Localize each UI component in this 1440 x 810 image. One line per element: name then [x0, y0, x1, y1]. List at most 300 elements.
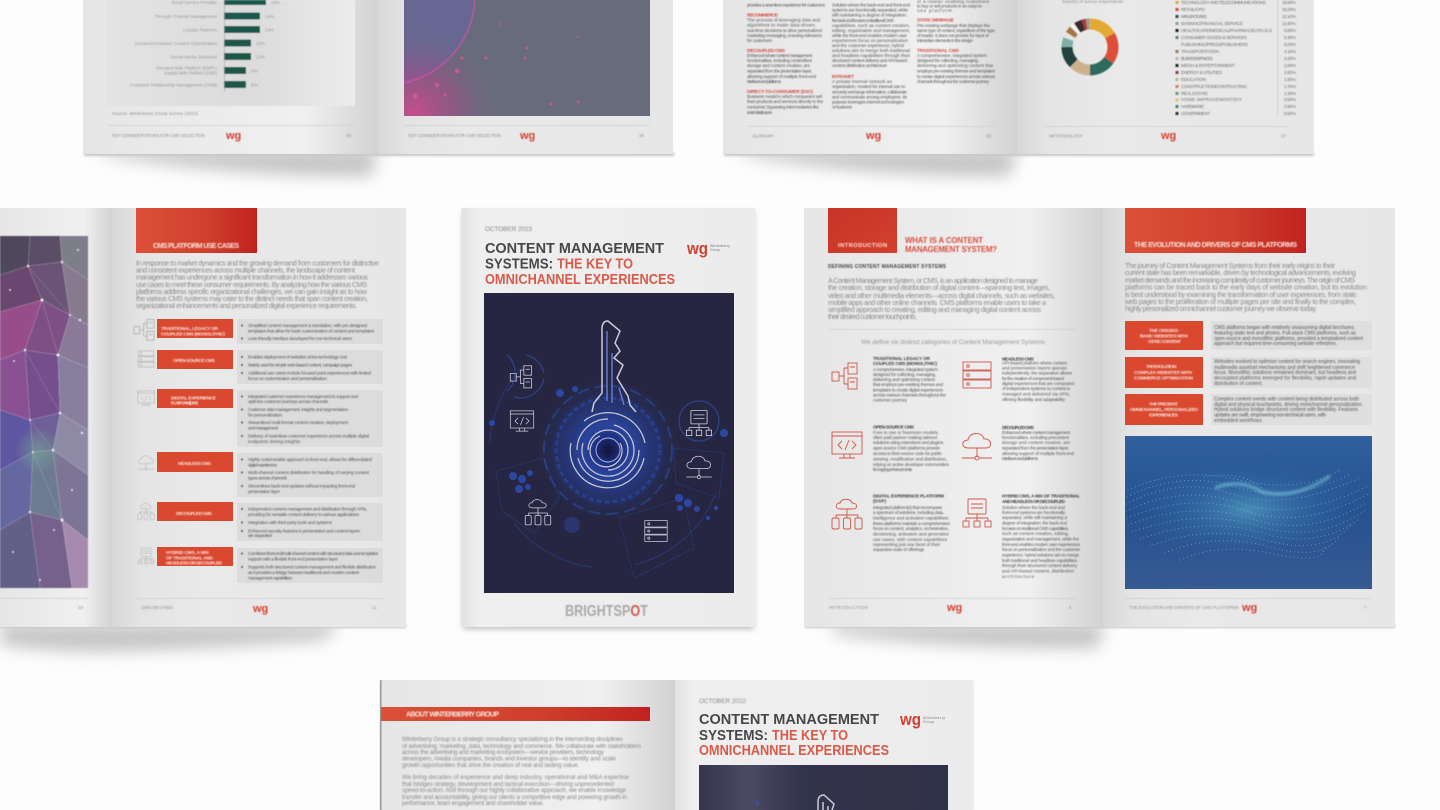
- category: digital experience platform: these platforms maintain a comprehensive: [873, 521, 950, 526]
- use case grey panels: [237, 319, 383, 583]
- category: hybrid: focuses on traditional CMS capabilities,: [1002, 526, 1069, 531]
- industry legend table: EDUCATION: [1181, 77, 1206, 82]
- glossary columns: capabilities, such as content creation,: [832, 23, 910, 28]
- section header: introduction tab: [828, 208, 897, 253]
- glossary columns: experiences focus on personalization: [832, 38, 908, 43]
- industry legend table: [1176, 0, 1296, 116]
- glossary columns: [747, 0, 996, 115]
- category: open-source: OPEN-SOURCE CMS: [873, 424, 914, 430]
- use case red labels: DECOUPLED CMS: [176, 511, 213, 517]
- bar chart panel: technology adoption: Supply-Side Platform (SSP): [164, 70, 217, 76]
- glossary columns: delivering and optimizing content that: [917, 63, 994, 68]
- about paragraphs: transfer and accountability, giving our clients a competitive edge and powering growth in: [402, 794, 628, 801]
- evolution stage: origins: featuring static text and photos. Full-stack CMS platforms, such as: [1214, 330, 1356, 336]
- evolution stage: present: [1125, 394, 1372, 425]
- use case red labels: [157, 319, 233, 566]
- bottom brochure spread: about Winterberry and cover: [380, 680, 973, 810]
- use case bullet text: templates that allow for basic customization of content and templates: [248, 328, 375, 334]
- glossary columns: RECOMMERCE: [747, 12, 779, 18]
- bar chart panel: technology adoption: 14%: [265, 28, 274, 32]
- intro paragraph: organizational enhancements and personalized digital experience requirements.: [136, 301, 357, 310]
- category: headless: [1002, 356, 1074, 402]
- footer: methodology page: wg: [1160, 130, 1176, 142]
- industry legend table: 12.10%: [1282, 14, 1296, 19]
- footer: evolution page: [1125, 598, 1372, 614]
- use case bullet text: as it provides a bridge between traditional and modern content: [248, 570, 360, 575]
- industry legend table: TECHNOLOGY AND TELECOMMUNICATIONS: [1181, 0, 1266, 5]
- glossary columns: The process of leveraging data and: [747, 18, 820, 22]
- glossary columns: consumer, bypassing intermediaries like: [747, 104, 819, 110]
- category: hybrid: front-end enables modern user experiences: [1002, 542, 1081, 547]
- category: open-source: solutions using extensions and plugins;: [873, 440, 944, 445]
- about paragraphs: speed-to-action. And through our highly collaborative approach, we enable knowledge: [402, 787, 627, 794]
- definition paragraph: mobile apps and other online channels. CMS platforms enable users to take a: [828, 298, 1046, 307]
- cover title: CONTENT MANAGEMENT: [485, 240, 665, 257]
- category: hybrid: through their structured content delivery: [1002, 563, 1078, 568]
- category: open-source: [873, 424, 950, 472]
- evolution stage: present: Complex content needs with content being distributed across both: [1214, 396, 1359, 402]
- bar chart panel: technology adoption: 12%: [256, 41, 265, 46]
- category: digital experience platform: use cases, with content capabilities: [873, 537, 948, 542]
- about paragraphs: growth opportunities that drive the creation of real and lasting value.: [402, 762, 579, 769]
- industry legend table: 2.60%: [1284, 63, 1296, 68]
- about paragraphs: of advertising, marketing, data, technology and commerce. We collaborate with stakeholders: [402, 743, 641, 750]
- footer: use cases page: wg: [252, 603, 268, 615]
- use case bullet text: and management: [248, 426, 279, 430]
- use case bullet text: Additional use cases include focused point experiences with limited: [248, 370, 371, 376]
- bottom cover title: [699, 711, 889, 759]
- use case bullet text: [241, 323, 379, 580]
- use case bullet text: Customer data management, insights and segmentation: [248, 407, 348, 412]
- category: digital experience platform: [873, 494, 950, 552]
- category: hybrid: HYBRID CMS, A MIX OF TRADITIONAL: [1002, 494, 1080, 498]
- category: traditional legacy: customer journey: [873, 398, 908, 402]
- category: traditional legacy: [873, 356, 946, 402]
- use case bullet text: types across channels: [248, 476, 288, 480]
- about paragraphs: [402, 736, 641, 807]
- category: hybrid: organization and management, while the: [1002, 536, 1079, 542]
- footer: glossary page: wg: [865, 130, 881, 142]
- evolution paragraph: web pages to the proliferation of multiple pages per site and finally to the complex,: [1124, 297, 1356, 306]
- evolution stage: evolution: THE EVOLUTION:: [1146, 364, 1177, 370]
- use case bullet text: digital experiences: [248, 462, 278, 468]
- cover logo: [686, 239, 730, 258]
- footer: right page: wg: [519, 130, 535, 142]
- cover title: OMNICHANNEL EXPERIENCES: [485, 271, 675, 288]
- glossary columns: still maintaining a degree of integration;: [832, 12, 907, 18]
- glossary columns: and communicate among employees. Its: [832, 94, 908, 100]
- bottom cover title: SYSTEMS:: [699, 727, 768, 744]
- glossary columns: for customers: [747, 38, 773, 43]
- use case red labels: COUPLED CMS (MONOLITHIC): [161, 332, 225, 338]
- category: hybrid: [1002, 494, 1081, 579]
- footer: right page: [404, 125, 650, 142]
- footer: evolution page: wg: [1241, 602, 1257, 614]
- use case bullet text: for personalization: [248, 412, 282, 418]
- evolution stage: origins: approach but required time-consuming website refreshes.: [1214, 341, 1337, 347]
- evolution stage: origins: STATIC CONTENT: [1148, 339, 1181, 345]
- bar chart panel: technology adoption: Social Media Solutions: [170, 54, 218, 60]
- industry legend table: HOME IMPROVEMENT/DIY: [1181, 97, 1243, 102]
- glossary columns: systems are functionally separated, while: [832, 8, 908, 12]
- use case bullet text: Supports both structured content management and flexible distribution: [248, 564, 376, 570]
- use case bullet text: Multi-channel content distribution for handling of varying content: [248, 470, 370, 475]
- industry legend table: RETAIL/CPG: [1181, 7, 1205, 12]
- category: headless: API-based platform where content: [1002, 360, 1068, 366]
- category: traditional legacy: templates to create digital experiences: [873, 388, 944, 392]
- category: digital experience platform: decisioning, activation and generative: [873, 532, 949, 536]
- industry legend table: HARDWARE: [1181, 104, 1204, 109]
- glossary columns: editing, organization and management,: [832, 28, 910, 33]
- bottom cover logo: Group: [923, 720, 934, 724]
- bar chart panel: technology adoption: Source: Winterberry Group Survey (2023): [112, 111, 198, 116]
- glossary columns: to buy or sell products in an easy-to-: [917, 4, 983, 8]
- category: headless: digital experiences that are composed: [1002, 381, 1074, 386]
- glossary columns: algorithms to make data-driven,: [747, 22, 816, 28]
- bar chart panel: technology adoption: Through Channel Management: [154, 14, 218, 19]
- category: digital experience platform: focus on content, analytics, orchestration,: [873, 526, 949, 531]
- industry legend table: HEALTHCARE/MEDICAL/PHARMACEUTICALS: [1181, 28, 1272, 33]
- category: traditional legacy: that employs pre-existing themes and: [873, 382, 943, 387]
- use case red labels: OF TRADITIONAL AND: [166, 556, 214, 562]
- category: decoupled: Enhanced where content management: [1002, 430, 1071, 435]
- footer: methodology page: 37: [1281, 134, 1287, 138]
- industry legend table: 5.40%: [1284, 35, 1296, 40]
- category: headless: independently; the separation allows: [1002, 370, 1073, 376]
- glossary columns: TRADITIONAL CMS: [917, 48, 960, 54]
- cover logo: Winterberry: [710, 244, 730, 248]
- definition paragraph: simplified approach to creating, editing and managing digital content across: [828, 305, 1041, 314]
- cover artwork: digital key on navy: [484, 293, 734, 593]
- footer: introduction page: [828, 598, 1077, 614]
- category: traditional legacy: A comprehensive, integrated system: [873, 367, 938, 372]
- industry legend table: 5.00%: [1284, 42, 1296, 47]
- bar chart panel: technology adoption: Loyalty Platform: [183, 28, 217, 32]
- top-right brochure spread: glossary and methodology: [723, 0, 1314, 176]
- glossary columns: Pre-existing webpage that displays the: [917, 23, 990, 28]
- right brochure spread: introduction and evolution: [804, 208, 1395, 648]
- industry legend table: 18.60%: [1282, 0, 1296, 5]
- intro paragraph: In response to market dynamics and the growing demand from customers for distinctive: [136, 258, 379, 267]
- definition paragraph: the creation, storage and distribution of digital content—spanning text, images,: [828, 283, 1050, 292]
- blue particle swirl image: [1125, 436, 1372, 589]
- category: headless: of independent systems so content is: [1002, 386, 1071, 391]
- category: headless: managed and delivered via APIs,: [1002, 392, 1070, 396]
- glossary columns: to create digital experiences across various: [917, 74, 996, 79]
- glossary columns: Enhanced where content management: [747, 53, 813, 58]
- category: decoupled: allowing support of multiple front-end: [1002, 451, 1074, 456]
- glossary columns: of reader. It does not provide for input or: [917, 33, 989, 38]
- intro paragraph: and consistent experiences across multiple channels, the landscape of content: [136, 266, 355, 275]
- use case bullet text: are separated: [248, 533, 272, 538]
- glossary columns: interfaces and platforms: [747, 79, 782, 84]
- category: hybrid: such as content creation, editing,: [1002, 531, 1069, 536]
- category: digital experience platform: Integrated platform(s) that encompass: [873, 505, 943, 510]
- glossary columns: retail distributors: [747, 110, 773, 115]
- intro paragraph: the various CMS systems may cater to the distinct needs that span content creation,: [136, 294, 368, 303]
- use case grey icons: [134, 319, 154, 564]
- footer: methodology page: [1045, 126, 1289, 142]
- glossary columns: structured content delivery and API-based: [832, 58, 907, 63]
- evolution paragraph: is best understood by examining the transformation of user experiences, from static: [1125, 290, 1357, 299]
- category: traditional legacy: across various channels throughout the: [873, 392, 946, 398]
- evolution stage: origins: open-source and monolithic platforms, provided a templatized content: [1214, 336, 1364, 342]
- bottom cover title: THE KEY TO: [772, 727, 848, 744]
- glossary columns: DECOUPLED CMS: [747, 48, 786, 54]
- evolution paragraph: platforms can be traced back to the early days of website creation, but its evolution: [1125, 283, 1367, 292]
- use case bullet text: Enables deployment of websites at low technology cost: [248, 354, 348, 360]
- industry legend table: BUSINESS SERVICES: [1181, 56, 1213, 61]
- footer: use cases page: CMS USE CASES: [141, 605, 173, 610]
- category: decoupled: interfaces and platforms: [1002, 456, 1039, 461]
- glossary columns: content distribution architecture: [832, 63, 887, 68]
- evolution stage: evolution: COMPLEX WEBSITES WITH: [1134, 370, 1193, 376]
- section header: evolution and drivers: THE EVOLUTION AND DRIVERS OF CMS PLATFORMS: [1134, 242, 1297, 249]
- section header: CMS platform use cases: CMS PLATFORM USE CASES: [153, 243, 239, 250]
- glossary columns: A comprehensive, integrated system: [917, 53, 987, 58]
- intro paragraph: [136, 258, 379, 310]
- evolution stage: origins: THE ORIGINS:: [1149, 328, 1179, 334]
- industry legend table: 0.50%: [1284, 104, 1296, 109]
- footer: use cases page: 11: [372, 605, 377, 610]
- use case bullet text: presentation layer: [248, 489, 280, 494]
- evolution stage: evolution: Websites evolved to optimize content for search engines, innovating: [1214, 359, 1360, 365]
- bottom cover logo: wg: [899, 710, 921, 729]
- industry legend table: 1.30%: [1284, 91, 1296, 96]
- category: headless: for the creation of component-based: [1002, 376, 1064, 381]
- category: decoupled: DECOUPLED CMS: [1002, 425, 1034, 430]
- purple network image: [404, 0, 650, 116]
- subheading: DEFINING CONTENT MANAGEMENT SYSTEMS: [828, 264, 947, 270]
- glossary columns: use platform.: [917, 8, 954, 13]
- glossary columns: and headless capabilities through their: [832, 53, 910, 58]
- about header band: ABOUT WINTERBERRY GROUP: [406, 712, 499, 718]
- bar chart panel: technology adoption: 14%: [265, 14, 274, 19]
- use case bullet text: support with a flexible front-end presentation layer: [248, 556, 338, 562]
- bottom cover artwork: top of key on navy: [699, 765, 948, 810]
- glossary columns: marketing messaging, ensuring relevance: [747, 33, 822, 38]
- bar chart panel: technology adoption: 9%: [251, 68, 258, 74]
- glossary columns: Business model in which companies sell: [747, 94, 822, 99]
- evolution stage: evolution: COMMERCE OPTIMIZATION: [1134, 376, 1194, 382]
- use case bullet text: Highly customizable approach to front-end, allows for differentiated: [248, 457, 372, 462]
- evolution stage: present: embedded workflows.: [1214, 418, 1263, 424]
- category: open-source: viewing, modification and distribution,: [873, 456, 947, 462]
- use case red labels: HEADLESS OR DECOUPLED: [166, 560, 223, 566]
- glossary columns: STATIC WEBPAGE: [917, 18, 955, 24]
- use case bullet text: Combines front-end/multi-channel content with structured data and templates: [248, 551, 379, 556]
- left page footer page number: 10: [78, 605, 84, 610]
- category: traditional legacy: TRADITIONAL LEGACY OR: [873, 356, 931, 361]
- footer: introduction page: wg: [946, 602, 962, 614]
- evolution paragraph: The journey of Content Management Systems from their early origins to their: [1125, 261, 1336, 270]
- industry legend table: 11.60%: [1282, 21, 1296, 26]
- use case bullet text: Streamlined multi-format content creation, deployment: [248, 420, 349, 425]
- category: headless: and presentation layers operate: [1002, 366, 1067, 370]
- glossary columns: allowing support of multiple front-end: [747, 74, 816, 79]
- intro paragraph: management has undergone a significant transformation in how it addresses various: [136, 273, 368, 282]
- section header: introduction tab: INTRODUCTION: [838, 243, 887, 249]
- heading: what is a content management system: MANAGEMENT SYSTEM?: [905, 245, 997, 254]
- industry legend table: TRANSPORTATION: [1181, 49, 1219, 54]
- use case bullet text: Independent content management and distribution through APIs,: [248, 506, 367, 512]
- bar chart panel: technology adoption: Dynamic/Creative Content Optimization: [135, 41, 217, 46]
- glossary columns: storage and content creation, are: [747, 63, 810, 68]
- glossary columns: solutions aim to merge both traditional: [832, 48, 910, 53]
- category: open-source: relying on active developer communities: [873, 462, 950, 467]
- industry legend table: 2.60%: [1284, 70, 1296, 75]
- bottom cover logo: [899, 710, 945, 729]
- use case bullet text: Enhanced security features in presentation and content layers: [248, 528, 361, 534]
- footer: introduction page: INTRODUCTION: [829, 605, 868, 610]
- evolution stage: evolution: focus. Monolithic solutions remained dominant, but headless and: [1214, 370, 1356, 376]
- use case bullet text: Integration with third-party tools and systems: [248, 520, 333, 525]
- glossary columns: the back-end focuses on traditional CMS: [832, 18, 894, 23]
- bar chart panel: technology adoption: [107, 0, 355, 116]
- heading: what is a content management system: WHAT IS A CONTENT: [905, 236, 983, 245]
- industry legend table: BANKING/FINANCIAL SERVICE: [1181, 21, 1243, 26]
- category: digital experience platform: a spectrum of solutions, including data,: [873, 510, 944, 515]
- bottom cover logo: Winterberry: [923, 716, 945, 720]
- definition paragraph: [828, 276, 1077, 346]
- category: hybrid: both traditional and headless capabilities: [1002, 558, 1078, 563]
- category: decoupled: storage and content creation, are: [1002, 440, 1070, 445]
- footer: right page: 36: [639, 133, 645, 138]
- glossary columns: functionalities, including content/text: [747, 58, 813, 63]
- footer: glossary page: GLOSSARY: [752, 134, 774, 138]
- category: hybrid: experience; hybrid solutions aim to merge: [1002, 552, 1079, 558]
- definition paragraph: A Content Management System, or CMS, is an application designed to manage: [828, 276, 1038, 285]
- evolution stage: evolution: distribution of content.: [1214, 381, 1263, 387]
- footer: methodology page: METHODOLOGY: [1049, 134, 1083, 138]
- use case red labels: HYBRID CMS, A MIX: [166, 550, 210, 556]
- glossary columns: or business: [832, 104, 853, 110]
- bar chart panel: technology adoption: 12%: [256, 54, 265, 60]
- use case bullet text: Delivery of seamless customer experience across multiple digital: [248, 434, 369, 438]
- footer: evolution page: THE EVOLUTION AND DRIVERS OF CMS PLATFORMS: [1129, 605, 1239, 610]
- category: traditional legacy: designed for collecting, managing,: [873, 372, 936, 377]
- category: hybrid: focus on personalization and the customer: [1002, 547, 1080, 552]
- category: hybrid: and API-based content, distribution: [1002, 568, 1074, 574]
- evolution stage: present: updates are swift, empowering non-technical users, with: [1214, 412, 1326, 418]
- glossary columns: securely exchange information, collaborate: [832, 90, 907, 94]
- glossary columns: DIRECT-TO-CONSUMER (D2C): [747, 89, 813, 95]
- cover title: [485, 240, 675, 288]
- glossary columns: organization, created for internal use to: [832, 84, 905, 89]
- about paragraphs: across the advertising and marketing ecosystem—service providers, technology: [402, 749, 605, 756]
- industry legend table: PUBLISHING/PRESS/PUBLISHERS: [1181, 42, 1248, 47]
- use case red labels: HEADLESS CMS: [178, 461, 212, 467]
- about paragraphs: Winterberry Group is a strategic consultancy specializing in the intersecting disciplines: [402, 736, 623, 743]
- category: hybrid: degree of integration; the back-end: [1002, 520, 1067, 526]
- use case red labels: TRADITIONAL, LEGACY OR: [161, 326, 219, 332]
- category: digital experience platform: (DXP): [873, 498, 886, 504]
- cover date: OCTOBER 2023: [485, 226, 532, 233]
- bar chart panel: technology adoption: Demand-Side Platform (DSP) /: [156, 66, 218, 70]
- polygon network image: [0, 236, 88, 588]
- about paragraphs: performance, team engagement and shareholder value.: [402, 800, 544, 807]
- left page footer page number: [0, 598, 88, 610]
- glossary columns: interactive elements in the design: [917, 38, 973, 43]
- evolution stage: origins: [1125, 321, 1372, 350]
- evolution stage: present: OMNICHANNEL, PERSONALIZED: [1130, 407, 1199, 413]
- industry legend table: CONSUMER GOODS & SERVICES: [1181, 35, 1247, 40]
- red category icons: [832, 362, 992, 529]
- category: decoupled: separated from the presentation layer,: [1002, 446, 1069, 450]
- top-left brochure spread: channel chart and purple image: [83, 0, 674, 176]
- use case bullet text: Simplified content management & translation, with pre-designed: [248, 323, 367, 328]
- footer: left page: 35: [346, 133, 352, 138]
- intro paragraph: platforms address specific organizational challenges, we can gain insight as to how: [136, 287, 368, 296]
- cover logo: wg: [686, 239, 708, 258]
- category: decoupled: functionalities, including precontent: [1002, 435, 1070, 440]
- bottom cover title: OMNICHANNEL EXPERIENCES: [699, 742, 889, 759]
- evolution stage: evolution: multimedia asset/art mechanisms and shift heightened commerce: [1214, 365, 1355, 371]
- glossary columns: employs pre-existing themes and templates: [917, 68, 996, 74]
- use case bullet text: Streamlines back-end updates without impacting front-end: [248, 484, 355, 488]
- cover title: SYSTEMS:: [485, 256, 553, 272]
- about paragraphs: that bridges strategy, development and tactical execution—driving unprecedented: [402, 781, 615, 788]
- category: hybrid: Solution where the back-end and: [1002, 505, 1065, 510]
- industry legend table: ENERGY & UTILITIES: [1181, 70, 1222, 75]
- definition paragraph: video and other multimedia elements—across digital channels, such as websites,: [828, 291, 1055, 300]
- use case red labels: DIGITAL EXPERIENCE: [171, 396, 217, 402]
- glossary columns: A private internal network an: [832, 79, 892, 84]
- category: digital experience platform: intelligence and activation capabilities;: [873, 516, 949, 520]
- use case red labels: OPEN-SOURCE CMS: [173, 358, 216, 364]
- bar chart panel: technology adoption: 8%: [251, 82, 258, 88]
- use case bullet text: Mainly used for simple web-based content, campaign pages: [248, 362, 353, 368]
- category: hybrid: separated, while still maintaining a: [1002, 515, 1067, 520]
- use case bullet text: Integrated customer experience management to support and: [248, 394, 358, 399]
- evolution stage: present: Hybrid solutions bridge structured content with flexibility. Features: [1214, 407, 1358, 413]
- cover sponsor logo: BRIGHTSPOT: [565, 603, 648, 620]
- industry legend table: CONSTRUCTION/CONTRACTING: [1181, 84, 1247, 89]
- about paragraphs: We bring decades of experience and deep industry, operational and M&A expertise: [402, 774, 630, 781]
- bar chart panel: technology adoption: Customer Relationship Management (CRM): [130, 82, 217, 88]
- industry legend table: REAL ESTATE: [1181, 91, 1208, 96]
- donut chart: respondents by industry: [1057, 0, 1124, 80]
- glossary columns: purpose leverages internet technologies: [832, 100, 905, 104]
- glossary columns: same type of content, regardless of the type: [917, 28, 995, 33]
- about paragraphs: developers, media companies, brands and investor groups—to identify and scale: [402, 756, 617, 762]
- footer: right page: KEY CONSIDERATIONS FOR CMS SELECTION: [408, 133, 501, 138]
- footer: evolution page: 7: [1364, 605, 1367, 610]
- glossary columns: and the customer experience; hybrid: [832, 43, 904, 48]
- glossary columns: separated from the presentation layer,: [747, 68, 812, 74]
- footer: glossary page: [747, 126, 995, 142]
- evolution paragraph: highly personalized omnichannel customer journey we observe today.: [1125, 304, 1317, 313]
- use case bullet text: management capabilities: [248, 576, 293, 580]
- industry legend table: 5.60%: [1284, 28, 1296, 33]
- category: digital experience platform: DIGITAL EXPERIENCE PLATFORM: [873, 494, 944, 498]
- evolution stage: present: digital and physical touchpoints, driving omnichannel personalization.: [1214, 402, 1363, 408]
- category: hybrid: architecture: [1002, 574, 1034, 579]
- industry legend table: 4.10%: [1284, 49, 1296, 54]
- category: traditional legacy: COUPLED CMS (MONOLITHIC): [873, 361, 937, 366]
- footer: introduction page: 6: [1069, 605, 1072, 610]
- evolution paragraph: [1124, 261, 1367, 313]
- bottom cover date: OCTOBER 2022: [699, 698, 746, 705]
- footer: use cases page: [136, 598, 383, 615]
- category: decoupled: [1002, 425, 1074, 461]
- footer: left page: KEY CONSIDERATIONS FOR CMS SELECTION: [112, 133, 205, 138]
- glossary columns: provides a seamless experience for customers: [747, 2, 826, 8]
- section header: evolution and drivers: [1125, 208, 1306, 253]
- use case bullet text: providing for versatile content delivery to various applications: [248, 512, 360, 517]
- evolution stage: origins: CMS platforms began with relatively unassuming digital brochures,: [1214, 325, 1355, 331]
- category: digital experience platform: expansive suite of offerings: [873, 547, 925, 552]
